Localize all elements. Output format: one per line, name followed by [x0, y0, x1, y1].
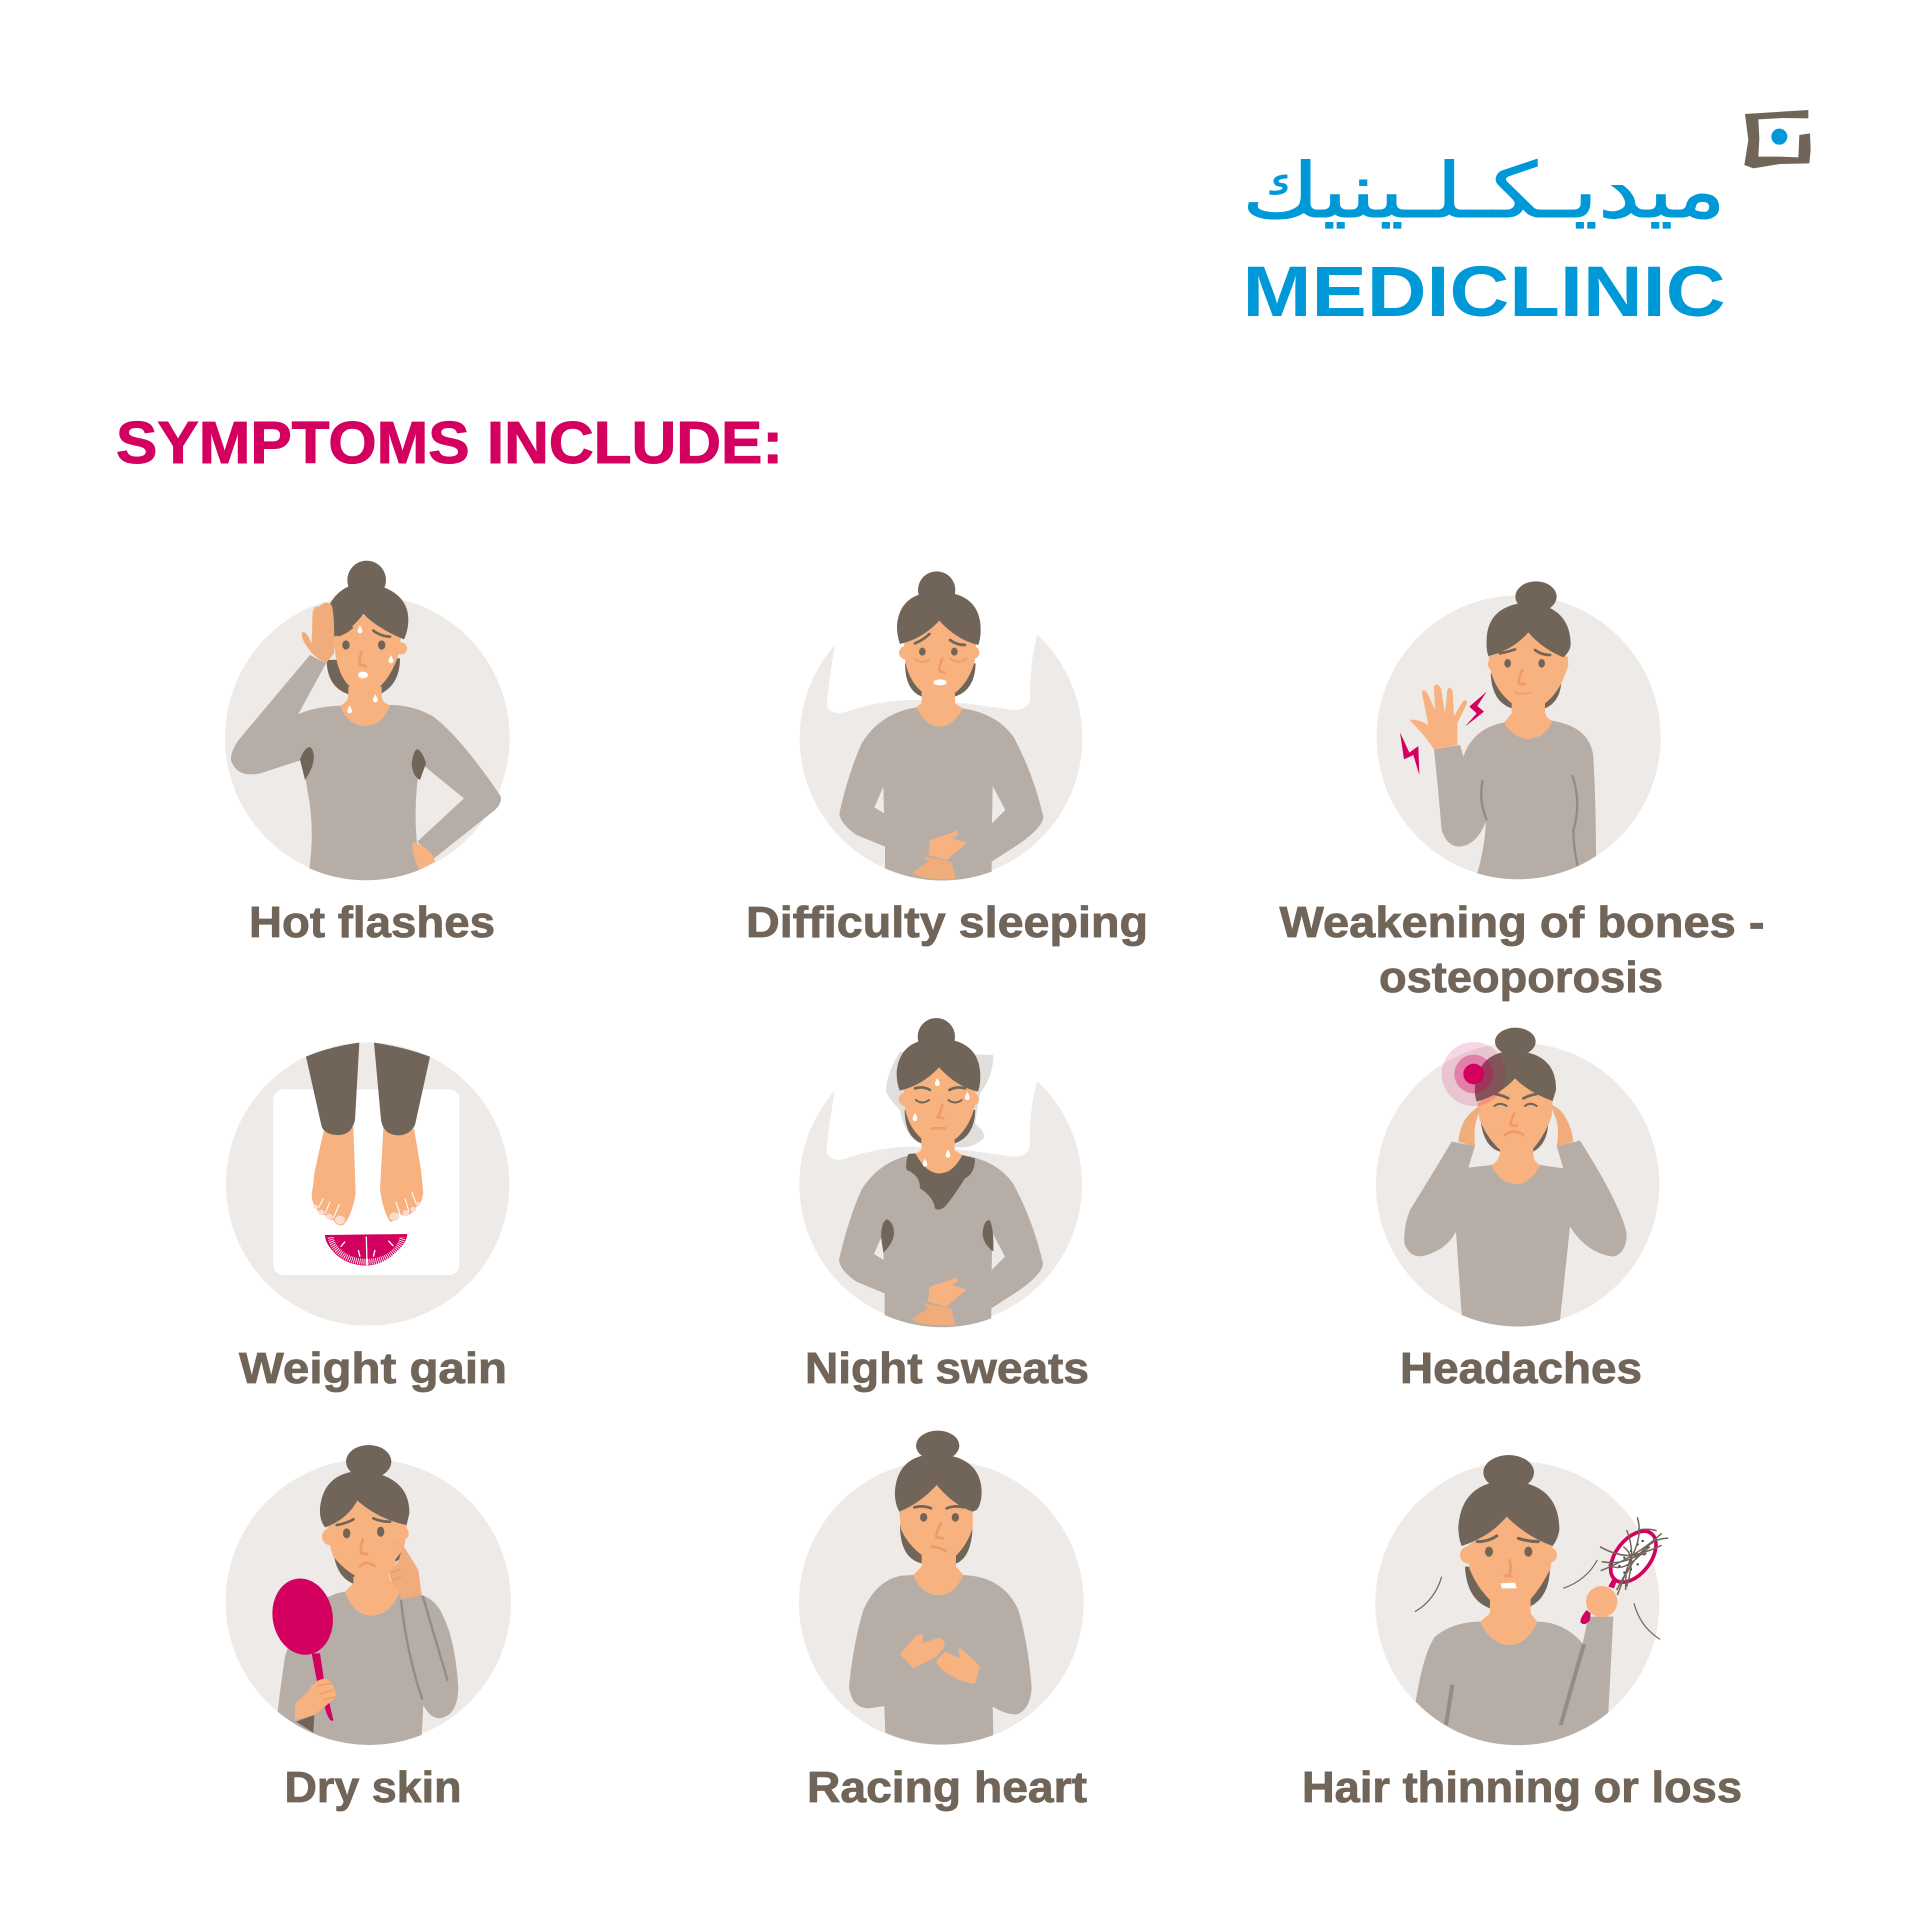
logo: Mediclinic — [1242, 110, 1811, 332]
icon: woman holding hairbrush with lost hair — [1375, 1455, 1668, 1745]
icon: woman looking in hand mirror — [226, 1445, 511, 1745]
icon: woman holding head with pain target — [1376, 1028, 1659, 1326]
panel: hot flashes — [225, 561, 510, 947]
panel: hair thinning or loss — [1302, 1455, 1742, 1812]
logo arabic wordmark: ميديـكـلـينيك — [1242, 146, 1726, 235]
panel: racing heart — [799, 1431, 1087, 1812]
icon: sleeping woman sweating — [799, 1018, 1082, 1327]
label: osteoporosis: osteoporosis — [1379, 953, 1663, 1002]
panel: dry skin — [226, 1445, 511, 1812]
logo latin wordmark: MEDICLINIC — [1242, 253, 1726, 332]
logo mark: square frame with dot — [1744, 110, 1811, 168]
panel: night sweats — [799, 1018, 1089, 1393]
label: dry skin: Dry skin — [284, 1763, 462, 1812]
label: headaches: Headaches — [1400, 1344, 1642, 1393]
icon: pain target — [1442, 1042, 1506, 1106]
label: weakening of bones: Weakening of bones - — [1280, 898, 1764, 947]
label: hot flashes: Hot flashes — [249, 898, 495, 947]
icon: woman with hands on chest — [799, 1431, 1084, 1745]
panel: weakening of bones — [1280, 581, 1764, 1002]
icon: hairbrush — [1580, 1517, 1668, 1624]
panel: headaches — [1376, 1028, 1659, 1393]
icon: woman with hand on forehead sweating — [225, 561, 510, 880]
icon: tired woman on pillow — [800, 571, 1082, 881]
title: SYMPTOMS INCLUDE: — [116, 410, 783, 476]
icon: woman raising hand with pain bolts — [1377, 581, 1661, 879]
panel: weight gain — [226, 1042, 509, 1393]
label: difficulty sleeping: Difficulty sleeping — [746, 898, 1148, 947]
panel: difficulty sleeping — [746, 571, 1148, 947]
label: night sweats: Night sweats — [805, 1344, 1089, 1393]
label: hair thinning or loss: Hair thinning or loss — [1302, 1763, 1742, 1812]
label: racing heart: Racing heart — [807, 1763, 1087, 1812]
icon: feet on bathroom scale — [226, 1042, 509, 1326]
label: weight gain: Weight gain — [239, 1344, 507, 1393]
